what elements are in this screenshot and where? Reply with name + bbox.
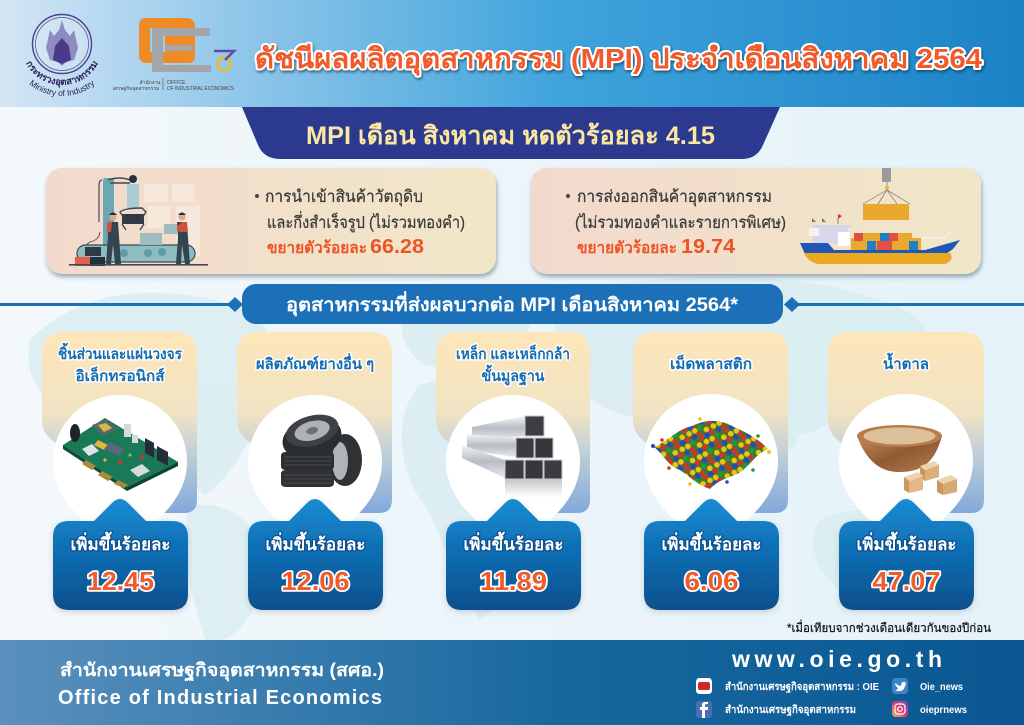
logo: Ministry of Industry seal <box>26 14 98 97</box>
heading: electronics: อิเล็กทรอนิกส์ <box>76 366 165 385</box>
imports text <box>255 188 465 258</box>
value box: steel: 11.89 <box>480 566 547 596</box>
heading: steel: เหล็ก และเหล็กกล้า <box>456 344 570 363</box>
value box: sugar <box>839 499 974 610</box>
youtube label: สำนักงานเศรษฐกิจอุตสาหกรรม : OIE <box>725 681 879 694</box>
imports text: 66.28 <box>370 236 424 258</box>
value box: sugar: เพิ่มขึ้นร้อยละ <box>856 531 956 554</box>
banner: MPI headline <box>242 107 780 159</box>
background world map <box>28 277 945 642</box>
icon: youtube <box>696 678 712 694</box>
section divider lines <box>0 297 1024 312</box>
value box: rubber products: 12.06 <box>282 566 350 596</box>
banner: MPI headline: MPI เดือน สิงหาคม หดตัวร้อยละ 4.15 <box>306 122 715 150</box>
instagram label: oieprnews <box>920 704 967 716</box>
footnote: *เมื่อเทียบจากช่วงเดือนเดียวกันของปีก่อน <box>787 619 991 635</box>
title: ดัชนีผลผลิตอุตสาหกรรม (MPI) ประจำเดือนสิงหาคม 2564 <box>255 43 982 76</box>
value box: plastic pellets: เพิ่มขึ้นร้อยละ <box>662 531 762 554</box>
facebook label: สำนักงานเศรษฐกิจอุตสาหกรรม <box>725 704 856 717</box>
value box: sugar: 47.07 <box>872 566 940 596</box>
icon: container ship and crane <box>800 168 960 264</box>
icon: factory robot arm and workers <box>69 175 208 266</box>
value box: electronics: เพิ่มขึ้นร้อยละ <box>70 531 170 554</box>
logo: Ministry of Industry seal: Ministry of Industry <box>30 80 94 97</box>
column: sugar <box>828 332 984 610</box>
heading: sugar: น้ำตาล <box>883 352 929 373</box>
icon: sugar bowl and cubes <box>857 425 957 495</box>
logo: Office of Industrial Economics: OF INDUSTRIAL ECONOMICS <box>167 86 235 92</box>
icon: stack of tyres <box>278 409 362 487</box>
exports text: ขยายตัวร้อยละ <box>577 239 677 257</box>
value box: electronics: 12.45 <box>87 566 154 596</box>
header band <box>0 0 1024 107</box>
exports text: (ไม่รวมทองคำและรายการพิเศษ) <box>575 213 786 232</box>
value box: electronics <box>53 499 188 610</box>
column: steel <box>436 332 590 610</box>
value box: rubber products: เพิ่มขึ้นร้อยละ <box>266 531 366 554</box>
organisation name <box>58 660 384 709</box>
logo: Office of Industrial Economics: OFFICE <box>167 80 186 86</box>
value box: plastic pellets: 6.06 <box>684 566 738 596</box>
logo: Office of Industrial Economics: เศรษฐกิจอุตสาหกรรม <box>113 85 159 92</box>
exports text: 19.74 <box>681 236 736 258</box>
section heading pill: อุตสาหกรรมที่ส่งผลบวกต่อ MPI เดือนสิงหาคม 2564* <box>286 291 739 317</box>
footer band <box>0 640 1024 725</box>
panel: imports <box>46 168 496 274</box>
value box: plastic pellets <box>644 499 779 610</box>
icon: twitter <box>892 678 908 694</box>
imports text: และกึ่งสำเร็จรูป (ไม่รวมทองคำ) <box>267 211 465 233</box>
logo: Office of Industrial Economics <box>113 18 235 92</box>
exports text: การส่งออกสินค้าอุตสาหกรรม <box>577 188 772 207</box>
value box: rubber products <box>248 499 383 610</box>
heading: plastic pellets: เม็ดพลาสติก <box>670 354 752 373</box>
icon: plastic pellets pile <box>651 417 771 489</box>
heading: rubber products: ผลิตภัณฑ์ยางอื่น ๆ <box>256 353 374 373</box>
section heading pill <box>242 284 783 324</box>
panel: exports <box>531 168 981 274</box>
website: www.oie.go.th <box>731 646 942 672</box>
twitter label: Oie_news <box>920 681 963 693</box>
value box: steel <box>446 499 581 610</box>
heading: electronics <box>58 342 183 385</box>
heading: steel: ขั้นมูลฐาน <box>482 364 545 386</box>
icon: facebook <box>696 701 712 718</box>
exports text <box>566 188 786 258</box>
icon: circuit board <box>63 418 178 491</box>
logo: Ministry of Industry seal: กระทรวงอุตสาหกรรม <box>26 60 98 88</box>
logo: Office of Industrial Economics: สำนักงาน <box>140 80 161 86</box>
imports text: การนำเข้าสินค้าวัตถุดิบ <box>265 188 423 207</box>
heading: electronics: ชิ้นส่วนและแผ่นวงจร <box>58 342 183 363</box>
value box: steel: เพิ่มขึ้นร้อยละ <box>464 531 564 554</box>
column: electronics <box>42 332 197 610</box>
column: rubber products <box>237 332 392 610</box>
icon: instagram <box>892 701 908 717</box>
column: plastic pellets <box>633 332 788 610</box>
organisation name: สำนักงานเศรษฐกิจอุตสาหกรรม (สศอ.) <box>60 660 384 682</box>
organisation name: Office of Industrial Economics <box>58 687 382 709</box>
icon: steel tubes <box>462 416 562 497</box>
heading: steel <box>456 344 570 386</box>
imports text: ขยายตัวร้อยละ <box>267 239 367 257</box>
